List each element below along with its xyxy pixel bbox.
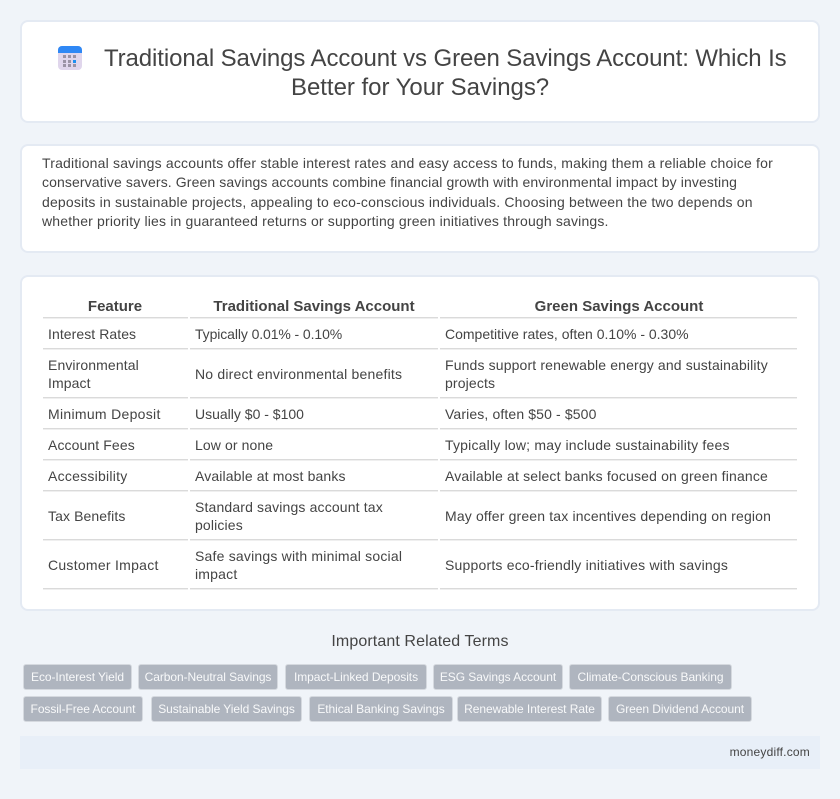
row: Account Fees: Account Fees: [48, 437, 135, 453]
cell: projects: [445, 375, 495, 391]
panel: title card: [20, 20, 820, 123]
tag: [23, 664, 132, 690]
tag: ESG Savings Account: [440, 670, 556, 684]
tag: [457, 696, 602, 722]
cell: policies: [195, 517, 243, 533]
header: Green Savings Account: Green Savings Account: [535, 298, 703, 315]
tag: [138, 664, 278, 690]
cell: [195, 499, 383, 533]
cell: May offer green tax incentives depending on region: [445, 508, 771, 524]
panel: summary text: [20, 144, 820, 253]
cell: Competitive rates, often 0.10% - 0.30%: [445, 326, 689, 342]
tag: Eco-Interest Yield: [31, 670, 124, 684]
row: Tax Benefits: Tax Benefits: [48, 508, 125, 524]
title: Traditional Savings Account vs Green Savings Account: Which Is: [104, 45, 787, 72]
text block: summary: conservative savers. Green savings accounts combine financial growth with environmental impact by investing: [42, 174, 737, 190]
header: Feature: Feature: [88, 298, 142, 315]
tag: Carbon-Neutral Savings: [145, 670, 271, 684]
cell: Safe savings with minimal social: [195, 548, 402, 564]
cell: Available at select banks focused on green finance: [445, 468, 768, 484]
tag: Sustainable Yield Savings: [158, 702, 295, 716]
footer bar: [20, 736, 820, 769]
text block: summary: [42, 155, 773, 229]
cell: [195, 548, 402, 582]
comparison table: [43, 298, 797, 590]
cell: [445, 357, 768, 391]
row: Environmental Impact: Environmental: [48, 357, 139, 373]
row: Minimum Deposit: Minimum Deposit: [48, 406, 161, 422]
tag: [309, 696, 453, 722]
heading: related terms: Important Related Terms: [331, 633, 509, 650]
cell: No direct environmental benefits: [195, 366, 402, 382]
cell: Available at most banks: [195, 468, 346, 484]
cell: Usually $0 - $100: [195, 406, 304, 422]
cell: Typically low; may include sustainability fees: [445, 437, 730, 453]
title: [104, 45, 787, 101]
row: Accessibility: Accessibility: [48, 468, 128, 484]
tag: [151, 696, 302, 722]
cell: impact: [195, 566, 237, 582]
tag: Ethical Banking Savings: [317, 702, 445, 716]
tag: Fossil-Free Account: [31, 702, 135, 716]
row: Customer Impact: Customer Impact: [48, 557, 159, 573]
cell: Funds support renewable energy and sustainability: [445, 357, 768, 373]
cell: Low or none: [195, 437, 273, 453]
panel: comparison table: [20, 275, 820, 611]
cell: Varies, often $50 - $500: [445, 406, 597, 422]
tag: [433, 664, 563, 690]
text block: summary: deposits in sustainable projects, appealing to eco-conscious individuals. Choosing between the two depends on: [42, 194, 753, 210]
tag: [608, 696, 752, 722]
header: Traditional Savings Account: Traditional Savings Account: [213, 298, 415, 315]
cell: Standard savings account tax: [195, 499, 383, 515]
row: Interest Rates: Interest Rates: [48, 326, 136, 342]
cell: Supports eco-friendly initiatives with savings: [445, 557, 728, 573]
tag: Renewable Interest Rate: [464, 702, 595, 716]
tag: [569, 664, 732, 690]
title: Better for Your Savings?: [291, 74, 549, 101]
tag: [285, 664, 427, 690]
tag: Climate-Conscious Banking: [578, 670, 723, 684]
tag: [23, 696, 143, 722]
text block: summary: whether priority lies in guaranteed returns or supporting green initiatives through savings.: [42, 213, 609, 229]
cell: Typically 0.01% - 0.10%: [195, 326, 342, 342]
icon: calendar: [58, 46, 82, 70]
footer text: moneydiff.com: [730, 745, 810, 759]
tag: Impact-Linked Deposits: [294, 670, 418, 684]
text block: summary: Traditional savings accounts offer stable interest rates and easy access to funds, making them a reliable choice for: [42, 155, 773, 171]
row: Environmental Impact: [48, 357, 139, 391]
tag: Green Dividend Account: [616, 702, 744, 716]
tags: related terms: [23, 664, 752, 722]
row: Environmental Impact: Impact: [48, 375, 91, 391]
